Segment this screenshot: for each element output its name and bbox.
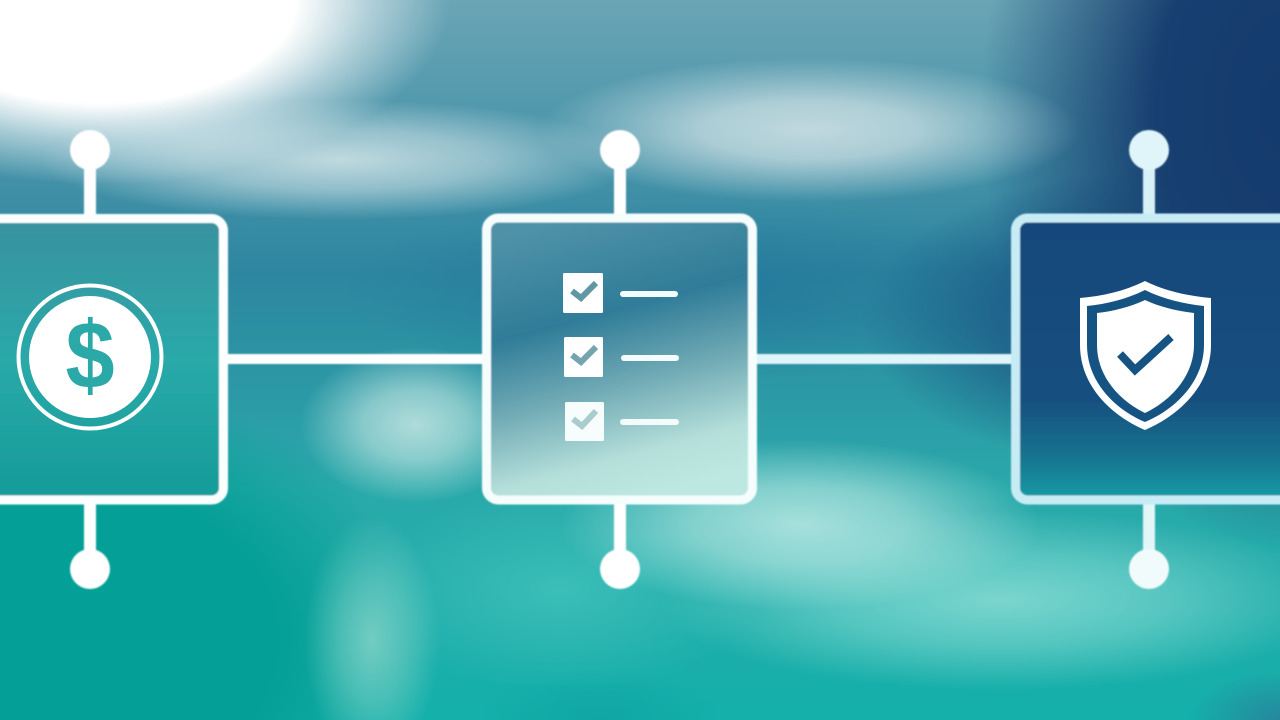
top pin [600,130,640,216]
bottom pin [600,502,640,589]
top pin [1129,130,1169,216]
checklist row 1 [563,273,678,313]
bottom pin [1129,502,1169,589]
top pin [70,130,110,216]
panel frame [0,218,224,500]
icon: checklist [563,273,679,441]
process node 2: checklist [486,130,752,589]
icon: shield with check [1080,281,1211,430]
icon: dollar coin [18,286,162,428]
panel frame [1016,218,1280,500]
icon: dollar coin: $ [65,302,115,409]
checklist row 3 [565,402,679,441]
panel frame [486,218,752,500]
checklist row 2 [564,337,679,377]
bottom pin [70,502,110,589]
process node 1: cost [0,130,224,589]
horizontal connector lines [226,354,1014,364]
process node 3: security [1016,130,1280,589]
